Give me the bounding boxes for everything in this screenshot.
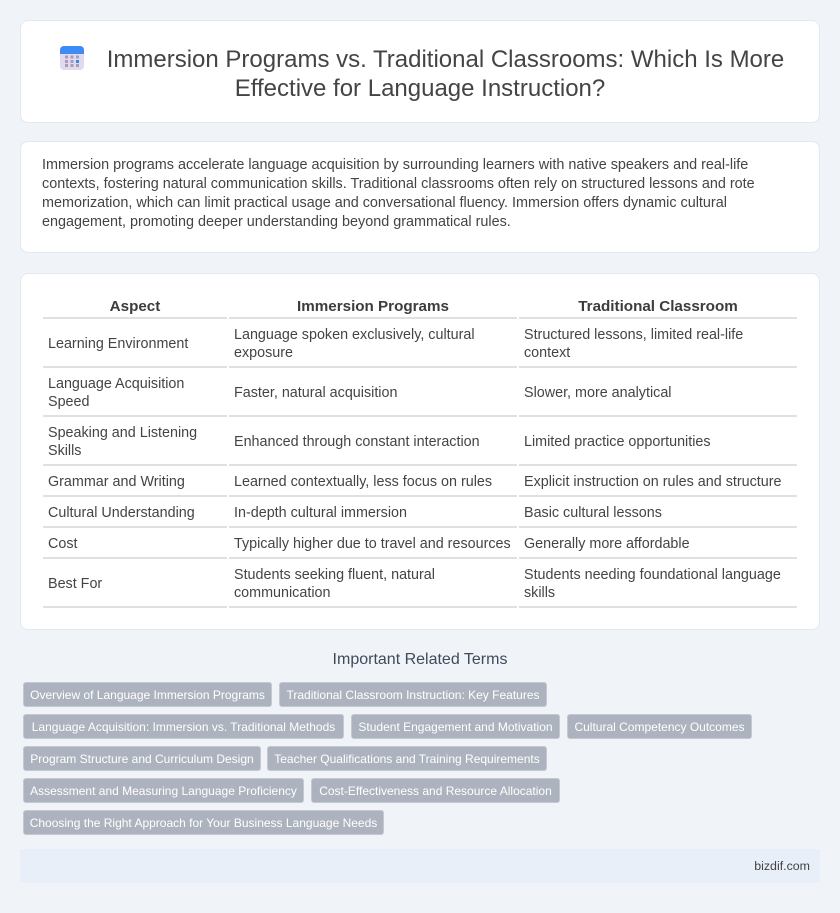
comparison table: Structured lessons, limited real-life (524, 327, 743, 343)
related term tags: Traditional Classroom Instruction: Key Features (286, 688, 540, 702)
heading: related terms: Important Related Terms (333, 651, 507, 668)
comparison table: Cost (48, 536, 78, 552)
comparison table: Students needing foundational language (524, 567, 781, 583)
related term tags: Cultural Competency Outcomes (574, 720, 745, 734)
comparison table: Generally more affordable (524, 536, 690, 552)
intro text: engagement, promoting deeper understanding beyond grammatical rules. (42, 214, 511, 230)
footer bar (20, 849, 820, 883)
comparison table: exposure (234, 345, 293, 361)
comparison table: Best For (48, 576, 102, 592)
title (107, 46, 784, 102)
comparison table: Typically higher due to travel and resources (234, 536, 511, 552)
related term tags: Student Engagement and Motivation (358, 720, 553, 734)
comparison table: In-depth cultural immersion (234, 505, 407, 521)
comparison table: Explicit instruction on rules and structure (524, 474, 782, 490)
panel: title card (20, 20, 820, 123)
comparison table: Learned contextually, less focus on rules (234, 474, 492, 490)
comparison table: Traditional Classroom (578, 298, 738, 315)
comparison table: Immersion Programs (297, 298, 449, 315)
related term tags: Choosing the Right Approach for Your Business Language Needs (30, 816, 377, 830)
related term tags: Language Acquisition: Immersion vs. Traditional Methods (32, 720, 335, 734)
comparison table: communication (234, 585, 330, 601)
comparison table: Cultural Understanding (48, 505, 195, 521)
comparison table: Skills (48, 443, 81, 459)
intro text: memorization, which can limit practical usage and conversational fluency. Immersion offers dynamic cultural (42, 195, 727, 211)
comparison table: Faster, natural acquisition (234, 385, 397, 401)
comparison table (43, 298, 797, 608)
comparison table: Grammar and Writing (48, 474, 185, 490)
comparison table: Students seeking fluent, natural (234, 567, 435, 583)
comparison table: Slower, more analytical (524, 385, 672, 401)
related term tags: Teacher Qualifications and Training Requirements (274, 752, 540, 766)
icon: calendar (60, 46, 84, 70)
comparison table: skills (524, 585, 555, 601)
panel: comparison table (20, 273, 820, 630)
comparison table: Language spoken exclusively, cultural (234, 327, 475, 343)
related term tags: Program Structure and Curriculum Design (30, 752, 254, 766)
panel: introduction (20, 141, 820, 253)
title: Immersion Programs vs. Traditional Classrooms: Which Is More (107, 46, 784, 73)
comparison table: context (524, 345, 570, 361)
comparison table: Language Acquisition (48, 376, 184, 392)
comparison table: Limited practice opportunities (524, 434, 711, 450)
intro text: contexts, fostering natural communication skills. Traditional classrooms often rely on structured lessons and rote (42, 176, 755, 192)
title: Effective for Language Instruction? (235, 75, 605, 102)
comparison table: Speaking and Listening (48, 425, 197, 441)
intro text: Immersion programs accelerate language acquisition by surrounding learners with native speakers and real-life (42, 156, 748, 172)
comparison table: Aspect (110, 298, 160, 315)
comparison table: Speed (48, 394, 89, 410)
comparison table: Basic cultural lessons (524, 505, 662, 521)
comparison table: Enhanced through constant interaction (234, 434, 480, 450)
related term tags (23, 682, 752, 835)
comparison table: Learning Environment (48, 336, 188, 352)
related term tags: Overview of Language Immersion Programs (30, 688, 265, 702)
related term tags: Cost-Effectiveness and Resource Allocation (319, 784, 552, 798)
footer site name: bizdif.com (754, 859, 810, 873)
related term tags: Assessment and Measuring Language Proficiency (30, 784, 297, 798)
intro text (42, 156, 755, 230)
